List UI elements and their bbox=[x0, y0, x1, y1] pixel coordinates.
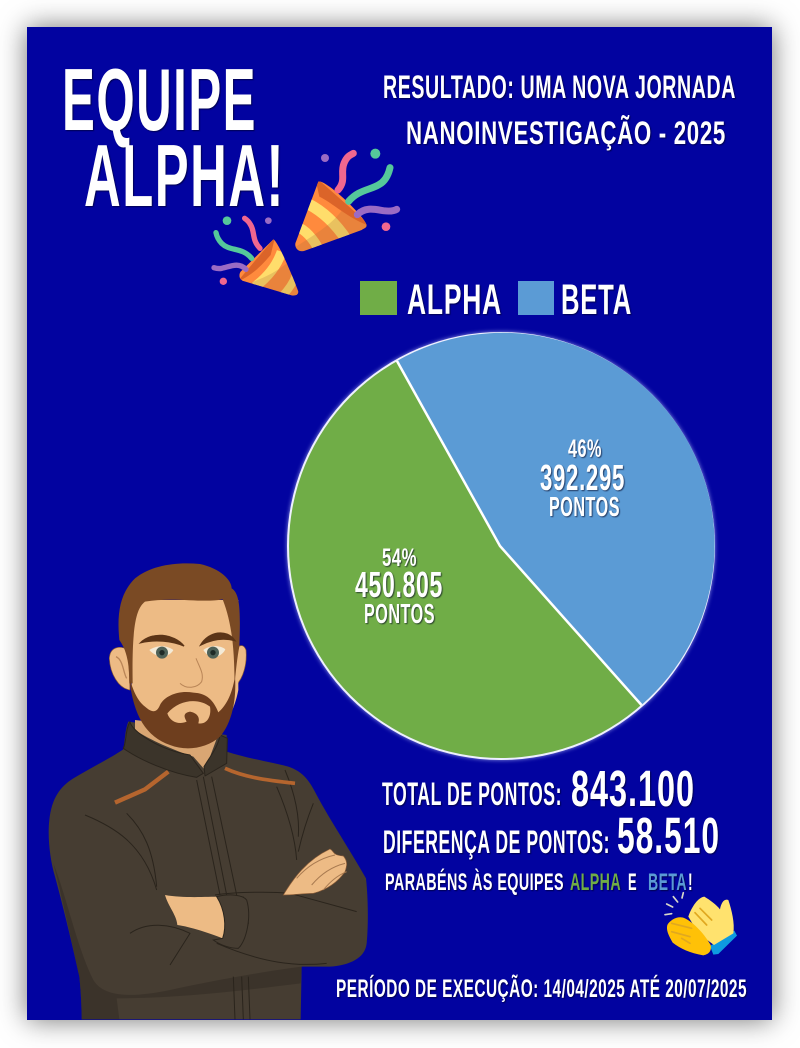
label: alpha bbox=[355, 544, 443, 629]
person illustration bbox=[49, 563, 368, 1019]
legend swatch: beta bbox=[518, 281, 554, 315]
stitching lines bbox=[85, 770, 357, 1019]
rear hand bbox=[688, 897, 734, 945]
front hand bbox=[667, 917, 711, 955]
icon: large party popper bbox=[290, 149, 397, 258]
total points bbox=[382, 760, 695, 817]
finger lines bbox=[672, 908, 712, 943]
points difference bbox=[383, 807, 720, 864]
collar bbox=[123, 722, 203, 777]
finger creases bbox=[297, 855, 347, 890]
face bbox=[132, 600, 238, 748]
nose bbox=[180, 658, 202, 687]
label: beta bbox=[540, 435, 625, 522]
neck bbox=[135, 720, 220, 770]
eyebrows bbox=[141, 635, 184, 646]
congratulations line: BETA bbox=[648, 869, 687, 896]
congratulations line: ALPHA bbox=[570, 869, 621, 896]
label: beta: 46% bbox=[568, 435, 602, 463]
shoulder piping bbox=[115, 772, 168, 803]
slice: beta 46% bbox=[397, 333, 715, 705]
legend label: alpha: ALPHA bbox=[407, 276, 502, 324]
points difference: 58.510 bbox=[617, 807, 720, 864]
congratulations line: E bbox=[628, 869, 637, 896]
left hand bbox=[165, 895, 225, 938]
total points: 843.100 bbox=[571, 760, 695, 817]
title: ALPHA! bbox=[84, 126, 285, 225]
pie outline bbox=[287, 332, 715, 760]
title: EQUIPE bbox=[62, 50, 257, 149]
icon: clapping hands bbox=[665, 893, 737, 955]
eyes bbox=[149, 646, 225, 659]
ears bbox=[109, 647, 130, 690]
subtitle bbox=[383, 69, 736, 151]
congratulations line: PARABÉNS ÀS EQUIPES bbox=[385, 868, 564, 896]
hair bbox=[118, 563, 240, 683]
beard bbox=[129, 677, 235, 748]
slice divider bbox=[397, 361, 642, 705]
label: alpha: 450.805 bbox=[355, 564, 443, 605]
sparks bbox=[665, 893, 683, 915]
icon: small party popper bbox=[214, 216, 303, 300]
cuffs bbox=[710, 931, 737, 955]
label: alpha: 54% bbox=[382, 544, 417, 572]
label: alpha: PONTOS bbox=[364, 598, 435, 629]
infographic artwork bbox=[48, 68, 748, 1020]
legend bbox=[360, 276, 632, 324]
congratulations line: ! bbox=[688, 869, 693, 896]
label: beta: PONTOS bbox=[549, 491, 620, 522]
jacket bbox=[49, 722, 368, 1019]
right hand bbox=[283, 849, 347, 895]
slice: alpha 54% bbox=[289, 334, 713, 758]
legend label: beta: BETA bbox=[561, 276, 632, 324]
title bbox=[62, 50, 285, 225]
points difference: DIFERENÇA DE PONTOS: bbox=[383, 824, 610, 860]
cuff bbox=[213, 895, 249, 948]
total points: TOTAL DE PONTOS: bbox=[382, 776, 562, 812]
label: beta: 392.295 bbox=[540, 457, 625, 498]
pie chart bbox=[287, 332, 715, 760]
legend swatch: alpha bbox=[360, 281, 397, 315]
